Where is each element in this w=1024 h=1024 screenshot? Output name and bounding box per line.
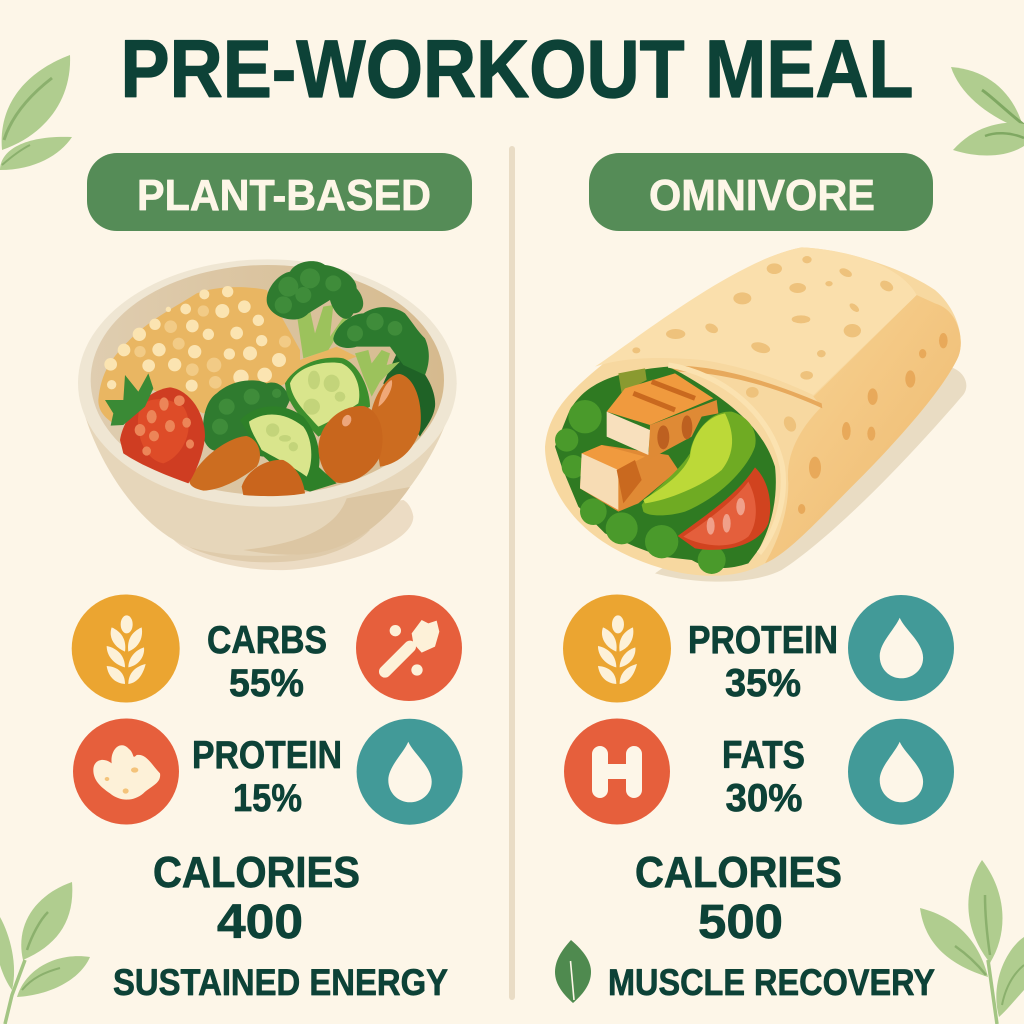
stat: carbs 55%: CARBS: [207, 619, 327, 662]
stat icon: water drop: [357, 719, 463, 825]
stat icon: protein food: [73, 718, 179, 824]
heading pill: plant-based: [87, 153, 472, 231]
illustration: chicken avocado wrap: [545, 247, 966, 582]
decoration: top-left leaves: [0, 55, 72, 170]
stat: fats 30%: FATS: [722, 734, 805, 777]
calories: 500: CALORIES: [635, 848, 842, 897]
calories: 400: [153, 848, 360, 949]
stat icon: H letter: [564, 718, 670, 824]
heading pill: plant-based: PLANT-BASED: [137, 171, 431, 220]
calories: 500: 500: [698, 896, 783, 949]
stat: fats 30%: [722, 734, 805, 820]
benefit: sustained energy: SUSTAINED ENERGY: [113, 962, 448, 1003]
title: PRE-WORKOUT MEAL: [120, 24, 914, 115]
vertical divider: [509, 146, 515, 1000]
stat: fats 30%: 30%: [726, 777, 802, 820]
calories: 500: [635, 848, 842, 949]
calories: 400: 400: [217, 896, 303, 949]
stat icon: tool: [356, 595, 462, 701]
stat: protein 35%: PROTEIN: [688, 619, 838, 662]
stat icon: wheat: [563, 594, 671, 702]
stat: carbs 55%: 55%: [229, 662, 304, 705]
calories: 400: CALORIES: [153, 848, 360, 897]
decoration: top-right leaves: [951, 67, 1024, 156]
stat icon: water drop: [848, 595, 954, 701]
panel: plant-based: [72, 153, 472, 1003]
benefit: muscle recovery: MUSCLE RECOVERY: [608, 962, 935, 1003]
stat: carbs 55%: [207, 619, 327, 705]
heading pill: omnivore: [589, 153, 933, 231]
stat icon: water drop: [848, 719, 954, 825]
stat: protein 35%: [688, 619, 838, 705]
illustration: grain and vegetable bowl: [78, 259, 457, 570]
stat: protein 15%: PROTEIN: [192, 734, 342, 777]
stat: protein 15%: [192, 734, 342, 820]
stat: protein 15%: 15%: [233, 777, 302, 820]
decoration: bottom-right leaves: [920, 860, 1024, 1024]
icon: leaf: [555, 940, 591, 1003]
stat: protein 35%: 35%: [725, 662, 801, 705]
stat icon: wheat carbs: [72, 594, 180, 702]
heading pill: omnivore: OMNIVORE: [649, 171, 875, 220]
decoration: bottom-left leaves: [0, 882, 90, 1024]
panel: omnivore: [545, 153, 966, 1003]
